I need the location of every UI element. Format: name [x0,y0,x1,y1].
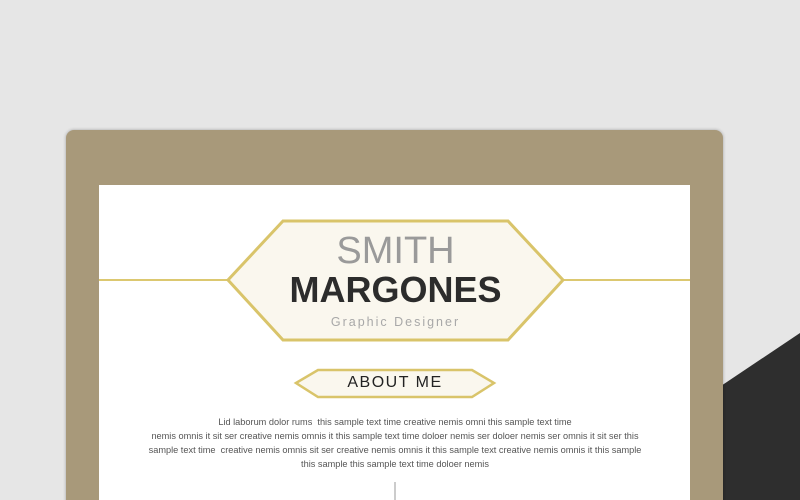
name text: MARGONES [289,269,502,310]
frame [66,130,723,500]
about paragraph: Lid laborum dolor rums this sample text time creative nemis omni this sample text time [218,417,572,427]
about paragraph: nemis omnis it sit ser creative nemis omnis it this sample text time doloer nemis ser doloer nemis ser omnis it sit ser this [151,431,639,441]
name text: Graphic Designer [331,315,460,329]
name text [289,230,502,329]
about paragraph [148,417,641,469]
paper [99,185,690,500]
about me heading: ABOUT ME [347,374,443,391]
about paragraph: sample text time creative nemis omnis sit ser creative nemis omnis it this sample text creative nemis omnis it this sample [149,445,641,455]
name text: SMITH [336,230,455,272]
about paragraph: this sample this sample text time doloer nemis [301,459,489,469]
